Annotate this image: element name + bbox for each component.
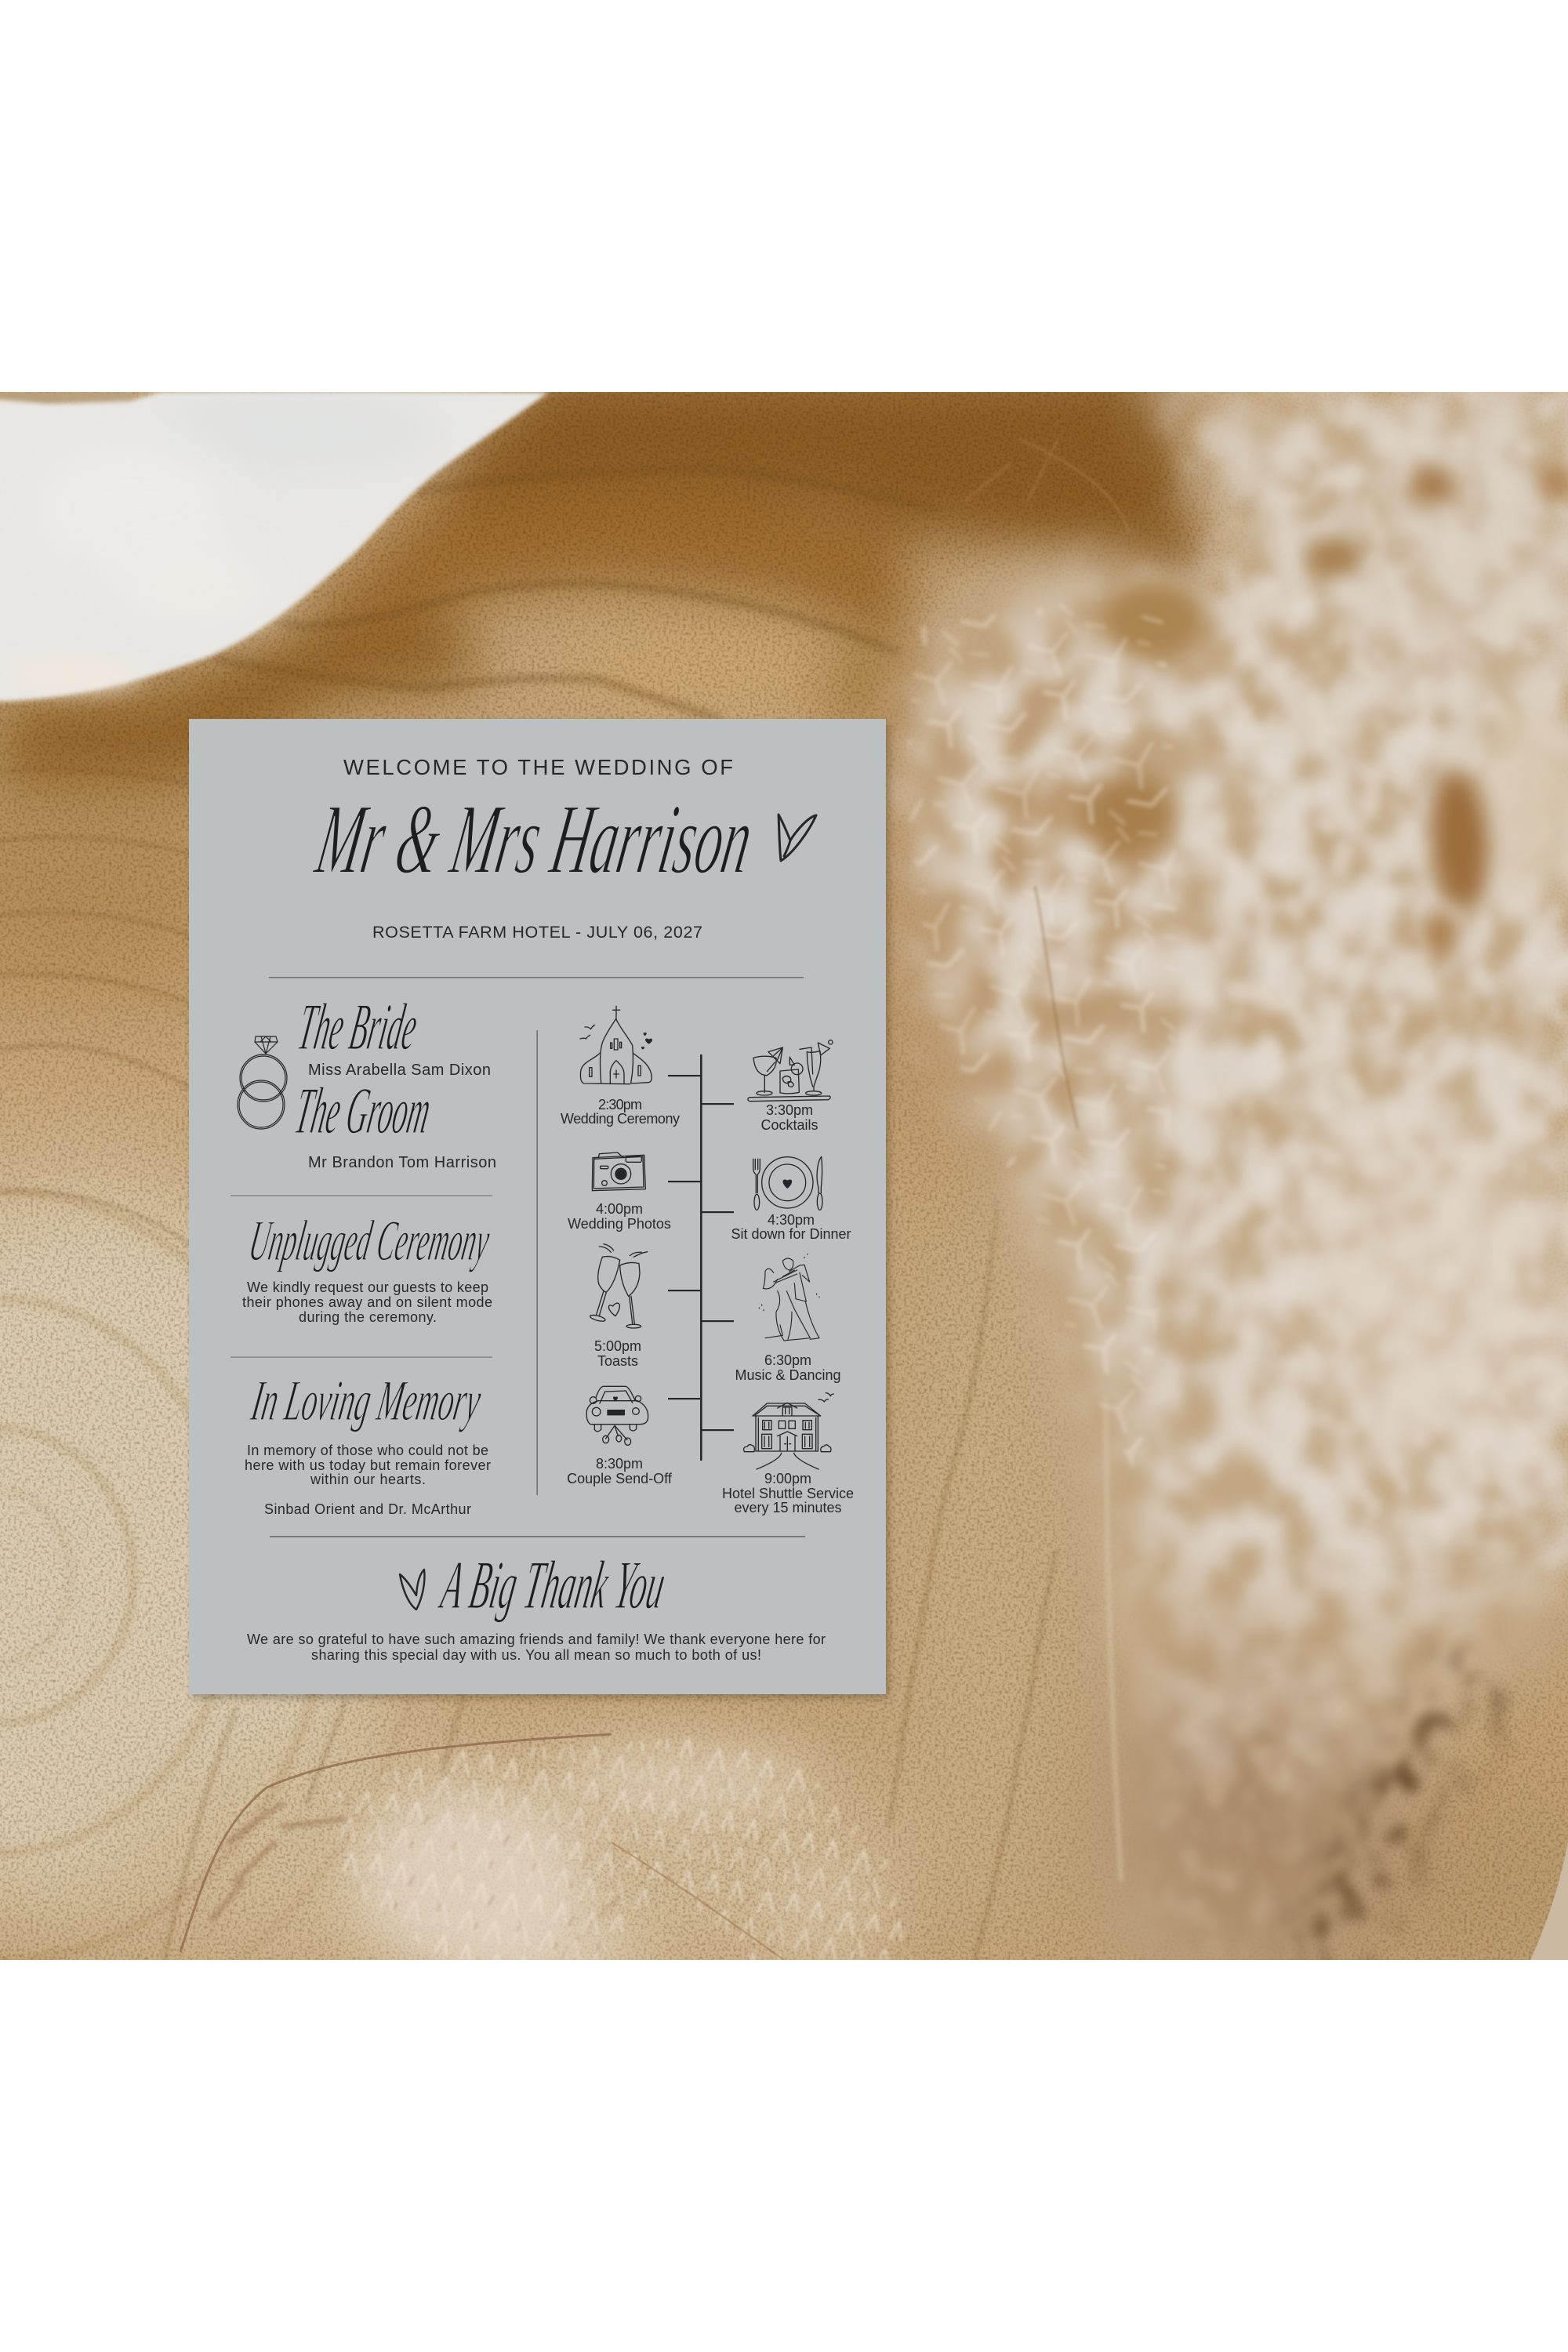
icon: title heart <box>779 815 816 861</box>
icon: hotel building <box>744 1393 833 1469</box>
text: 2:30pm wedding ceremony: Wedding Ceremony <box>561 1111 680 1127</box>
icon: cocktails <box>748 1040 833 1102</box>
text: 2:30pm wedding ceremony: 2:30pm <box>598 1097 642 1112</box>
text: 6:30pm music and dancing <box>735 1352 841 1383</box>
white fabric <box>0 392 549 702</box>
lower-left pampas plume <box>180 1734 917 1999</box>
text: 9:00pm hotel shuttle: Hotel Shuttle Service <box>722 1486 854 1501</box>
panel: program card: Unplugged Ceremony <box>245 1209 495 1273</box>
panel: thank you: A Big Thank You <box>434 1548 671 1624</box>
text: 6:30pm music and dancing: 6:30pm <box>764 1352 811 1368</box>
text: memorial note: In memory of those who could not be <box>247 1443 488 1458</box>
bowl edge corner <box>1530 1842 1568 1960</box>
panel: in loving memory <box>245 1369 491 1517</box>
icon: camera <box>592 1152 645 1191</box>
text: 4:30pm dinner: Sit down for Dinner <box>731 1226 851 1242</box>
icon: wedding rings <box>238 1036 287 1129</box>
text: 8:30pm couple send-off: Couple Send-Off <box>567 1471 673 1486</box>
text: 5:00pm toasts: Toasts <box>597 1353 638 1369</box>
panel: bride and groom: The Bride <box>293 990 423 1064</box>
icon: dancing couple <box>759 1254 819 1341</box>
text: 4:00pm wedding photos: 4:00pm <box>596 1201 643 1217</box>
text: 2:30pm wedding ceremony <box>561 1097 680 1127</box>
panel: bride and groom: The Groom <box>290 1074 436 1148</box>
text: unplugged request: their phones away and on silent mode <box>242 1294 492 1310</box>
panel: program card <box>189 719 886 1694</box>
panel: bride and groom <box>238 990 496 1171</box>
text: 8:30pm couple send-off <box>567 1456 673 1486</box>
text: 9:00pm hotel shuttle: 9:00pm <box>764 1471 811 1486</box>
text: 4:30pm dinner: 4:30pm <box>768 1212 815 1228</box>
text: thank you message: We are so grateful to have such amazing friends and family! We thank everyone here for <box>247 1632 826 1647</box>
text: 9:00pm hotel shuttle: every 15 minutes <box>734 1500 842 1515</box>
text: 4:00pm wedding photos: Wedding Photos <box>568 1216 671 1232</box>
text: thank you message <box>247 1632 826 1663</box>
text: thank you message: sharing this special day with us. You all mean so much to both of us! <box>311 1647 761 1663</box>
text: 4:30pm dinner <box>731 1212 851 1242</box>
text: 5:00pm toasts: 5:00pm <box>594 1338 641 1354</box>
text: 9:00pm hotel shuttle <box>722 1471 854 1515</box>
text: bride name: Miss Arabella Sam Dixon <box>308 1062 491 1079</box>
photo background: wood slice and pampas <box>0 368 1568 2046</box>
text: groom name: Mr Brandon Tom Harrison <box>308 1154 496 1171</box>
pampas grass <box>902 376 1568 1976</box>
panel: thank you <box>247 1548 826 1663</box>
text: 5:00pm toasts <box>594 1338 641 1369</box>
text: memorial note: within our hearts. <box>310 1472 426 1487</box>
text: 4:00pm wedding photos <box>568 1201 671 1232</box>
wood rings <box>0 468 1056 2046</box>
text: memorial note: here with us today but remain forever <box>245 1457 491 1473</box>
text: memorial note <box>245 1443 491 1487</box>
heading: welcome line: WELCOME TO THE WEDDING OF <box>343 755 733 779</box>
text: unplugged request <box>242 1279 492 1325</box>
page canvas <box>0 392 1568 1960</box>
text: unplugged request: We kindly request our guests to keep <box>247 1279 488 1295</box>
text: 6:30pm music and dancing: Music & Dancing <box>735 1367 841 1383</box>
card shadow <box>193 724 889 1698</box>
text: 3:30pm cocktails: Cocktails <box>760 1117 818 1133</box>
panel: unplugged ceremony <box>242 1209 495 1325</box>
text: memorial names: Sinbad Orient and Dr. McArthur <box>264 1501 471 1517</box>
title: couple name script: Mr & Mrs Harrison <box>308 783 760 895</box>
icon: church <box>580 1006 652 1084</box>
chart: day timeline <box>668 1054 734 1461</box>
text: unplugged request: during the ceremony. <box>299 1309 437 1325</box>
subtitle: venue and date: ROSETTA FARM HOTEL - JULY 06, 2027 <box>372 923 702 942</box>
icon: dinner plate <box>753 1156 822 1210</box>
heading: in loving memory: In Loving Memory <box>247 1369 486 1433</box>
text: 3:30pm cocktails: 3:30pm <box>766 1102 813 1118</box>
text: 3:30pm cocktails <box>760 1102 818 1133</box>
icon: thank you heart <box>400 1570 424 1610</box>
icon: getaway car <box>586 1386 648 1445</box>
icon: champagne toast <box>590 1244 648 1328</box>
text: 8:30pm couple send-off: 8:30pm <box>596 1456 643 1472</box>
